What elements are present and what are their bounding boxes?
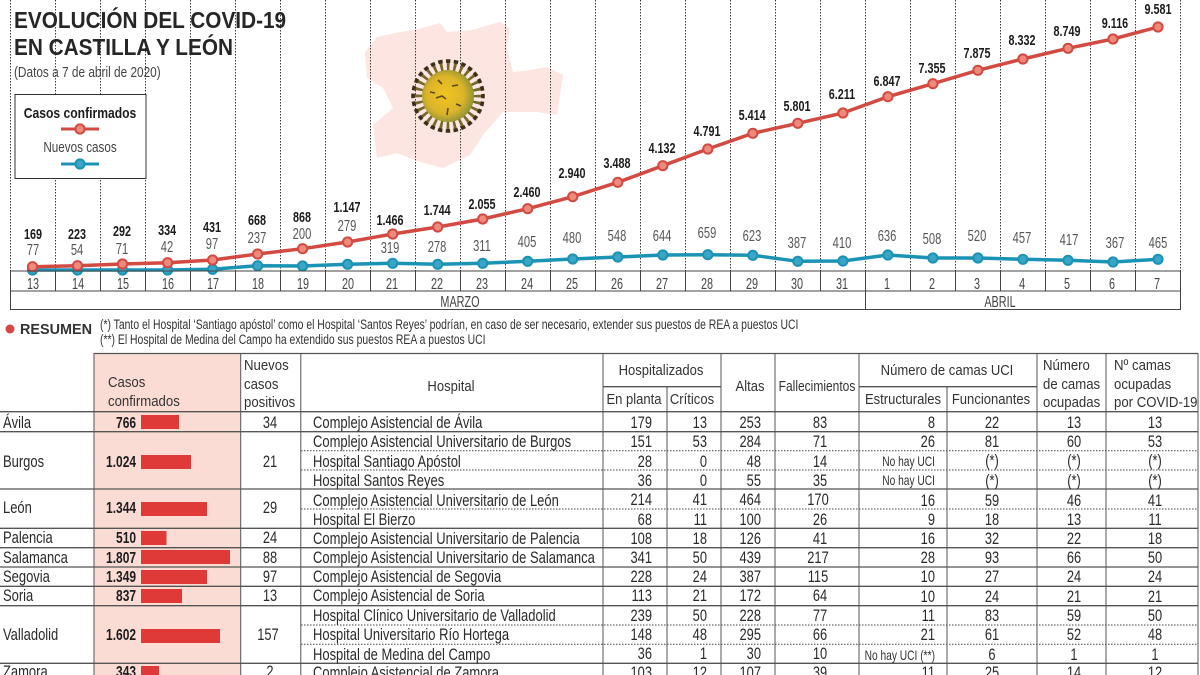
provinces, cases and bars: Soria — [3, 588, 34, 605]
provinces, cases and bars: 13 — [263, 588, 277, 605]
provinces, cases and bars: Burgos — [3, 454, 44, 471]
hospital data: (*) — [1067, 453, 1081, 470]
hospital data: 50 — [693, 608, 707, 625]
provinces, cases and bars: 34 — [263, 415, 277, 432]
values: casos confirmados: 223 — [68, 225, 86, 242]
hospital data: 68 — [638, 512, 652, 529]
hospital data: 1 — [1151, 647, 1159, 664]
date axis: 14 — [72, 275, 85, 292]
values: nuevos casos: 237 — [248, 229, 266, 246]
subtitle: (Datos a 7 de abril de 2020) — [14, 64, 161, 80]
hospital data: 21 — [1148, 589, 1162, 606]
hospital data: 32 — [985, 531, 999, 548]
table header: Funcionantes — [952, 390, 1030, 407]
provinces, cases and bars: Valladolid — [3, 627, 58, 644]
hospital data: 50 — [1148, 608, 1162, 625]
hospital data: 46 — [1067, 493, 1081, 510]
hospital data: 214 — [631, 492, 652, 509]
values: nuevos casos: 71 — [116, 240, 128, 257]
hospital data: 13 — [1067, 415, 1081, 432]
legend: Nuevos casos — [43, 139, 117, 155]
hospital data: 16 — [921, 531, 935, 548]
provinces, cases and bars: Segovia — [3, 569, 51, 586]
values: nuevos casos: 278 — [428, 238, 446, 255]
date axis: 5 — [1064, 275, 1070, 292]
date axis: 25 — [566, 275, 578, 292]
hospital data: 83 — [985, 608, 999, 625]
hospital data: 53 — [1148, 434, 1162, 451]
provinces, cases and bars: León — [3, 500, 32, 517]
table header: Nuevos — [244, 356, 289, 373]
date axis: ABRIL — [984, 293, 1016, 310]
values: casos confirmados: 2.055 — [469, 195, 495, 212]
hospital data: 100 — [740, 512, 761, 529]
date axis: 7 — [1154, 275, 1160, 292]
hospital data: No hay UCI — [882, 472, 935, 488]
date axis: 28 — [701, 275, 713, 292]
hospital data: 21 — [921, 627, 935, 644]
values: nuevos casos: 367 — [1106, 234, 1124, 251]
hospital data: 24 — [1067, 569, 1081, 586]
date axis: 21 — [386, 275, 398, 292]
hospital names: Hospital Santiago Apóstol — [313, 454, 461, 471]
table — [0, 353, 1198, 675]
hospital data: 126 — [740, 531, 761, 548]
hospital data: 21 — [1067, 589, 1081, 606]
hospital data: 61 — [985, 627, 999, 644]
values: casos confirmados: 7.355 — [919, 59, 945, 76]
hospital data: (*) — [985, 453, 999, 470]
hospital data: 24 — [1148, 569, 1162, 586]
table grid — [0, 353, 1198, 675]
legend: Casos confirmados — [24, 105, 137, 121]
hospital data: 41 — [1148, 493, 1162, 510]
date axis: 31 — [836, 275, 848, 292]
values: nuevos casos: 405 — [518, 233, 536, 250]
provinces, cases and bars: 837 — [116, 586, 136, 604]
provinces, cases and bars: 766 — [116, 413, 136, 431]
date axis — [10, 271, 1180, 310]
hospital data: 0 — [700, 473, 707, 490]
date axis: 4 — [1019, 275, 1026, 292]
hospital data: 8 — [928, 415, 935, 432]
values: casos confirmados: 9.581 — [1145, 0, 1171, 17]
date axis: 17 — [207, 275, 219, 292]
hospital data: 36 — [638, 473, 652, 490]
table header: ocupadas — [1043, 393, 1100, 410]
values: nuevos casos: 465 — [1149, 234, 1167, 251]
hospital names: Complejo Asistencial Universitario de Burgos — [313, 434, 571, 451]
provinces, cases and bars: 1.807 — [106, 548, 136, 566]
hospital data: 27 — [985, 569, 999, 586]
hospital data: 172 — [740, 588, 761, 605]
date axis: 24 — [521, 275, 534, 292]
hospital data: 48 — [1148, 627, 1162, 644]
hospital data: 13 — [1067, 512, 1081, 529]
date axis: 1 — [884, 275, 890, 292]
hospital data: No hay UCI (**) — [865, 647, 935, 663]
values: casos confirmados: 334 — [158, 221, 177, 238]
hospital names — [313, 414, 596, 675]
values: casos confirmados: 431 — [203, 218, 221, 235]
hospital data: 18 — [1148, 531, 1162, 548]
table header: ocupadas — [1114, 375, 1171, 392]
hospital data: 50 — [693, 550, 707, 567]
hospital data: 41 — [693, 492, 707, 509]
date axis: 16 — [162, 275, 174, 292]
hospital data: 439 — [740, 550, 761, 567]
hospital data: 341 — [631, 550, 652, 567]
values: casos confirmados: 9.116 — [1102, 14, 1128, 31]
values: nuevos casos: 520 — [968, 227, 986, 244]
line: nuevos casos — [28, 250, 1163, 275]
table header: de camas — [1043, 375, 1100, 392]
hospital data: 228 — [631, 569, 652, 586]
hospital data: 66 — [813, 627, 827, 644]
hospital data: (*) — [985, 473, 999, 490]
hospital data: 11 — [1148, 512, 1162, 529]
hospital data: 18 — [693, 531, 707, 548]
hospital names: Hospital El Bierzo — [313, 512, 415, 529]
provinces, cases and bars: 97 — [263, 569, 277, 586]
values: casos confirmados: 1.466 — [377, 211, 403, 228]
provinces, cases and bars: Ávila — [3, 414, 32, 432]
values: casos confirmados: 5.801 — [784, 97, 810, 114]
hospital names: Hospital Universitario Río Hortega — [313, 627, 510, 644]
hospital data: 77 — [813, 608, 827, 625]
provinces, cases and bars: 510 — [116, 528, 136, 546]
values: casos confirmados: 8.332 — [1009, 31, 1035, 48]
hospital names: Complejo Asistencial de Segovia — [313, 569, 502, 586]
hospital data: 13 — [1148, 415, 1162, 432]
date axis: 2 — [929, 275, 935, 292]
date axis: 13 — [27, 275, 39, 292]
hospital data: 22 — [985, 415, 999, 432]
hospital data: 24 — [693, 569, 707, 586]
values: casos confirmados: 1.744 — [424, 201, 451, 218]
table header: positivos — [244, 393, 295, 410]
hospital data — [631, 415, 1162, 675]
table header: confirmados — [108, 392, 180, 409]
table header: Estructurales — [865, 390, 941, 407]
hospital data: 71 — [813, 434, 827, 451]
hospital data: 36 — [638, 646, 652, 663]
values: nuevos casos: 42 — [161, 238, 173, 255]
table header: En planta — [606, 390, 662, 407]
hospital data: 66 — [1067, 550, 1081, 567]
hospital data: 464 — [740, 492, 761, 509]
values: casos confirmados: 6.211 — [829, 85, 855, 102]
hospital data: 10 — [921, 569, 935, 586]
values: nuevos casos: 54 — [71, 241, 84, 258]
hospital data: 64 — [813, 588, 827, 605]
values: nuevos casos: 457 — [1013, 229, 1031, 246]
provinces, cases and bars: 1.349 — [106, 567, 136, 585]
hospital data: 6 — [988, 647, 996, 664]
hospital data: 48 — [693, 627, 707, 644]
hospital data: 108 — [631, 531, 652, 548]
values: nuevos casos: 311 — [473, 237, 491, 254]
title: EVOLUCIÓN DEL COVID-19 — [14, 7, 286, 33]
hospital data: 59 — [1067, 608, 1081, 625]
provinces, cases and bars: 88 — [263, 550, 277, 567]
hospital data: 148 — [631, 627, 652, 644]
provinces, cases and bars: 24 — [263, 530, 277, 547]
values: nuevos casos: 200 — [293, 225, 311, 242]
values: casos confirmados: 3.488 — [604, 154, 630, 171]
hospital data: 10 — [921, 589, 935, 606]
confirmed cases column background — [94, 353, 241, 675]
values: nuevos casos: 417 — [1060, 231, 1078, 248]
hospital names: Hospital Santos Reyes — [313, 473, 444, 490]
provinces, cases and bars: Salamanca — [3, 550, 69, 567]
values: casos confirmados: 7.875 — [964, 44, 990, 61]
footnotes: (**) El Hospital de Medina del Campo ha extendido sus puestos REA a puestos UCI — [100, 332, 486, 347]
date axis: 30 — [791, 275, 803, 292]
hospital data: 21 — [693, 588, 707, 605]
hospital data: 1 — [1070, 647, 1078, 664]
hospital data: 253 — [740, 415, 761, 432]
hospital data: 24 — [985, 589, 999, 606]
hospital data: No hay UCI — [882, 453, 935, 469]
hospital data: 151 — [631, 434, 652, 451]
hospital data: 59 — [985, 493, 999, 510]
provinces, cases and bars: 1.344 — [106, 498, 136, 516]
hospital data: 28 — [638, 454, 652, 471]
hospital data: 11 — [694, 512, 707, 529]
line: casos confirmados — [28, 22, 1163, 271]
provinces, cases and bars: 29 — [263, 500, 277, 517]
hospital data: 1 — [700, 646, 707, 663]
values: casos confirmados: 5.414 — [739, 106, 766, 123]
values: nuevos casos: 508 — [923, 230, 941, 247]
values: nuevos casos: 548 — [608, 227, 626, 244]
values: casos confirmados: 1.147 — [334, 198, 360, 215]
hospital data: (*) — [1148, 473, 1162, 490]
table header: Nº camas — [1114, 356, 1171, 373]
hospital data: 16 — [921, 493, 935, 510]
hospital data: 179 — [631, 415, 652, 432]
legend — [15, 94, 146, 178]
provinces, cases and bars: Palencia — [3, 530, 53, 547]
hospital data: 239 — [631, 608, 652, 625]
hospital names: Hospital Clínico Universitario de Valladolid — [313, 608, 556, 625]
table header: Hospital — [427, 377, 475, 394]
values: nuevos casos: 319 — [381, 239, 399, 256]
values: casos confirmados: 6.847 — [874, 72, 900, 89]
values: nuevos casos: 77 — [27, 241, 39, 258]
values: casos confirmados: 668 — [248, 211, 266, 228]
title — [14, 7, 286, 60]
hospital data: 170 — [807, 492, 829, 509]
values: nuevos casos: 97 — [206, 235, 218, 252]
hospital data: 11 — [922, 608, 935, 625]
hospital data: 387 — [740, 569, 761, 586]
hospital names: Complejo Asistencial Universitario de Palencia — [313, 531, 580, 548]
hospital data: (*) — [1067, 473, 1081, 490]
hospital data: 83 — [813, 415, 827, 432]
hospital data: 9 — [928, 512, 935, 529]
hospital data: 26 — [921, 434, 935, 451]
hospital data: 10 — [813, 646, 827, 663]
table header: Fallecimientos — [779, 378, 856, 394]
hospital data: 50 — [1148, 550, 1162, 567]
values: casos confirmados — [24, 0, 1171, 242]
values: nuevos casos: 623 — [743, 227, 761, 244]
date axis: 6 — [1109, 275, 1115, 292]
title: EN CASTILLA Y LEÓN — [14, 34, 233, 60]
values: casos confirmados: 868 — [293, 208, 311, 225]
table header: casos — [244, 375, 278, 392]
footnotes: (*) Tanto el Hospital ‘Santiago apóstol’ como el Hospital ‘Santos Reyes’ podrían, en caso de ser necesario, extender sus puestos de REA a puestos UCI — [100, 317, 798, 332]
icon: coronavirus — [413, 61, 483, 131]
hospital data: 284 — [740, 434, 761, 451]
values: casos confirmados: 4.132 — [649, 139, 675, 156]
provinces, cases and bars: 157 — [257, 627, 279, 644]
provinces, cases and bars: 21 — [263, 454, 277, 471]
hospital names: Complejo Asistencial de Ávila — [313, 414, 483, 432]
values: casos confirmados: 169 — [24, 225, 42, 242]
date axis: 15 — [117, 275, 129, 292]
resumen heading: RESUMEN — [20, 322, 92, 338]
date axis: 18 — [252, 275, 264, 292]
hospital data: 53 — [693, 434, 707, 451]
values: nuevos casos: 480 — [563, 229, 581, 246]
date axis: 3 — [974, 275, 980, 292]
values: casos confirmados: 292 — [113, 222, 131, 239]
date axis: 23 — [476, 275, 488, 292]
provinces, cases and bars — [3, 413, 279, 675]
date axis: 19 — [297, 275, 309, 292]
values: casos confirmados: 2.940 — [559, 164, 585, 181]
hospital data: 0 — [700, 454, 707, 471]
hospital data: 48 — [747, 454, 761, 471]
values: nuevos casos: 387 — [788, 234, 806, 251]
hospital data: 26 — [813, 512, 827, 529]
date axis: 29 — [746, 275, 758, 292]
date axis: MARZO — [440, 293, 480, 310]
hospital data: 13 — [693, 415, 707, 432]
table header — [108, 356, 1198, 410]
hospital data: 228 — [740, 608, 761, 625]
table header: por COVID-19 — [1114, 393, 1198, 410]
values: casos confirmados: 2.460 — [514, 183, 540, 200]
hospital names: Hospital de Medina del Campo — [313, 647, 490, 664]
values: casos confirmados: 8.749 — [1054, 22, 1080, 39]
footnotes — [100, 317, 798, 347]
values: nuevos casos: 659 — [698, 224, 716, 241]
hospital data: 30 — [747, 646, 761, 663]
hospital data: (*) — [1148, 453, 1162, 470]
date axis: 26 — [611, 275, 623, 292]
table header: Número — [1043, 356, 1090, 373]
hospital data: 295 — [740, 627, 761, 644]
date axis: 22 — [431, 275, 443, 292]
values: nuevos casos: 410 — [833, 234, 851, 251]
values: nuevos casos — [27, 217, 1167, 258]
hospital data: 14 — [813, 454, 827, 471]
date axis: 27 — [656, 275, 668, 292]
map of Castilla y León — [365, 22, 563, 168]
hospital data: 35 — [813, 473, 827, 490]
hospital data: 113 — [631, 588, 652, 605]
date axis: 20 — [342, 275, 354, 292]
hospital data: 52 — [1067, 627, 1081, 644]
table header: Número de camas UCI — [881, 361, 1013, 378]
values: nuevos casos: 636 — [878, 227, 896, 244]
provinces, cases and bars: 1.602 — [106, 625, 136, 643]
table header: Críticos — [670, 390, 714, 407]
hospital data: 22 — [1067, 531, 1081, 548]
values: nuevos casos: 279 — [338, 217, 356, 234]
hospital data: 41 — [813, 531, 827, 548]
table header: Altas — [736, 377, 764, 394]
values: casos confirmados: 4.791 — [694, 122, 720, 139]
hospital data: 115 — [808, 569, 828, 586]
hospital data: 18 — [985, 512, 999, 529]
hospital names: Complejo Asistencial Universitario de Salamanca — [313, 550, 596, 567]
table header: Casos — [108, 373, 145, 390]
hospital data: 217 — [807, 550, 829, 567]
hospital data: 28 — [921, 550, 935, 567]
hospital names: Complejo Asistencial de Soria — [313, 588, 485, 605]
hospital names: Complejo Asistencial Universitario de León — [313, 493, 559, 510]
hospital data: 81 — [985, 434, 999, 451]
values: nuevos casos: 644 — [653, 227, 672, 244]
table header: Hospitalizados — [619, 361, 703, 378]
hospital data: 60 — [1067, 434, 1081, 451]
hospital data: 93 — [985, 550, 999, 567]
hospital data: 55 — [747, 473, 761, 490]
provinces, cases and bars: 1.024 — [106, 452, 136, 470]
